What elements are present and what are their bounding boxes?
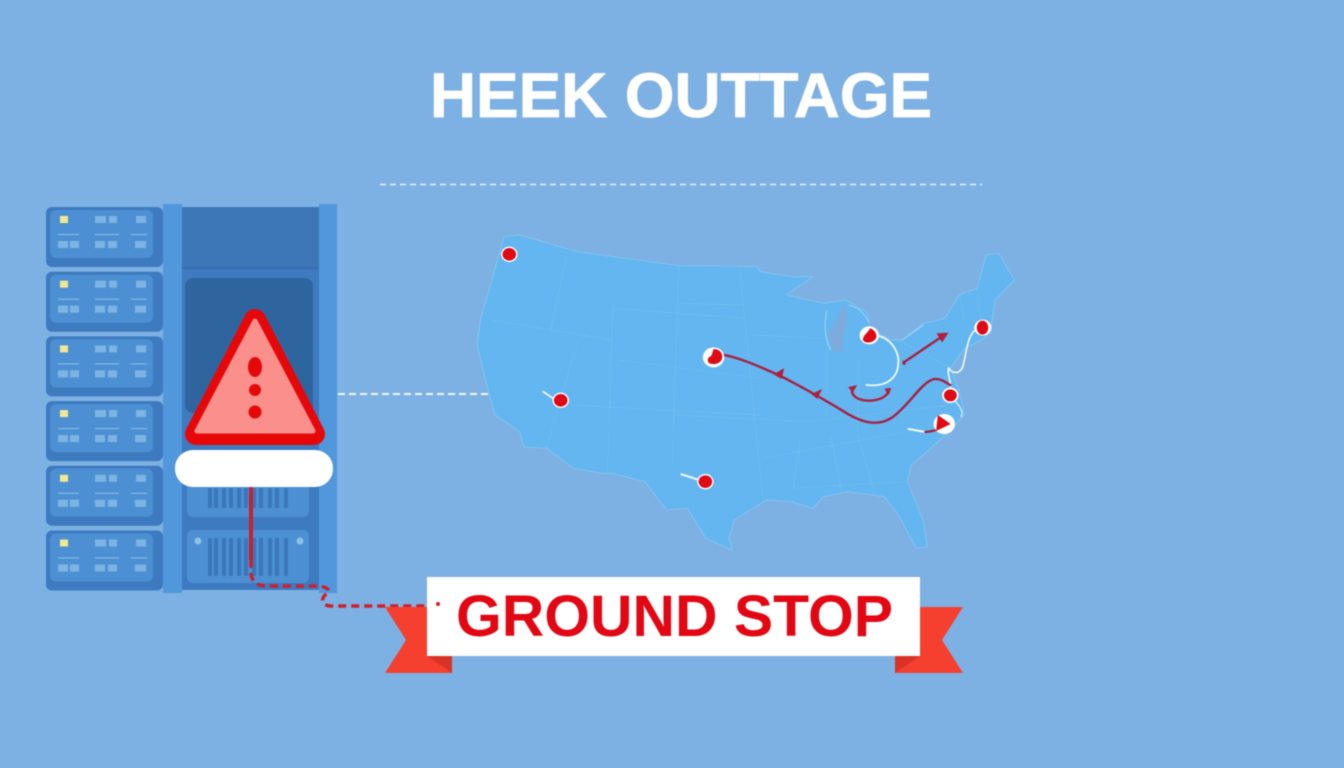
rack posts: [163, 204, 337, 593]
icon: warning triangle: [196, 320, 314, 434]
connector end dot: [436, 602, 440, 606]
map landmass: [477, 235, 1015, 550]
server units: [46, 207, 163, 590]
panel: server rack: [46, 204, 337, 593]
white status pill: [175, 450, 333, 487]
ribbon right tail: [895, 607, 963, 673]
connector: red dashed line to banner: [249, 487, 253, 560]
banner text: GROUND STOP: [456, 584, 893, 649]
white route lines: [543, 328, 977, 479]
ribbon left tail: [385, 607, 452, 673]
great lakes: [825, 305, 924, 353]
map: United States: [477, 235, 1015, 550]
vented lower units: [187, 465, 309, 583]
right rack bay: [182, 207, 319, 590]
banner: ground stop: [385, 577, 963, 673]
red flight routes: [720, 333, 950, 432]
title: HEEK OUTTAGE: [430, 61, 932, 131]
airport markers: [501, 247, 991, 489]
state borders: [491, 257, 981, 500]
